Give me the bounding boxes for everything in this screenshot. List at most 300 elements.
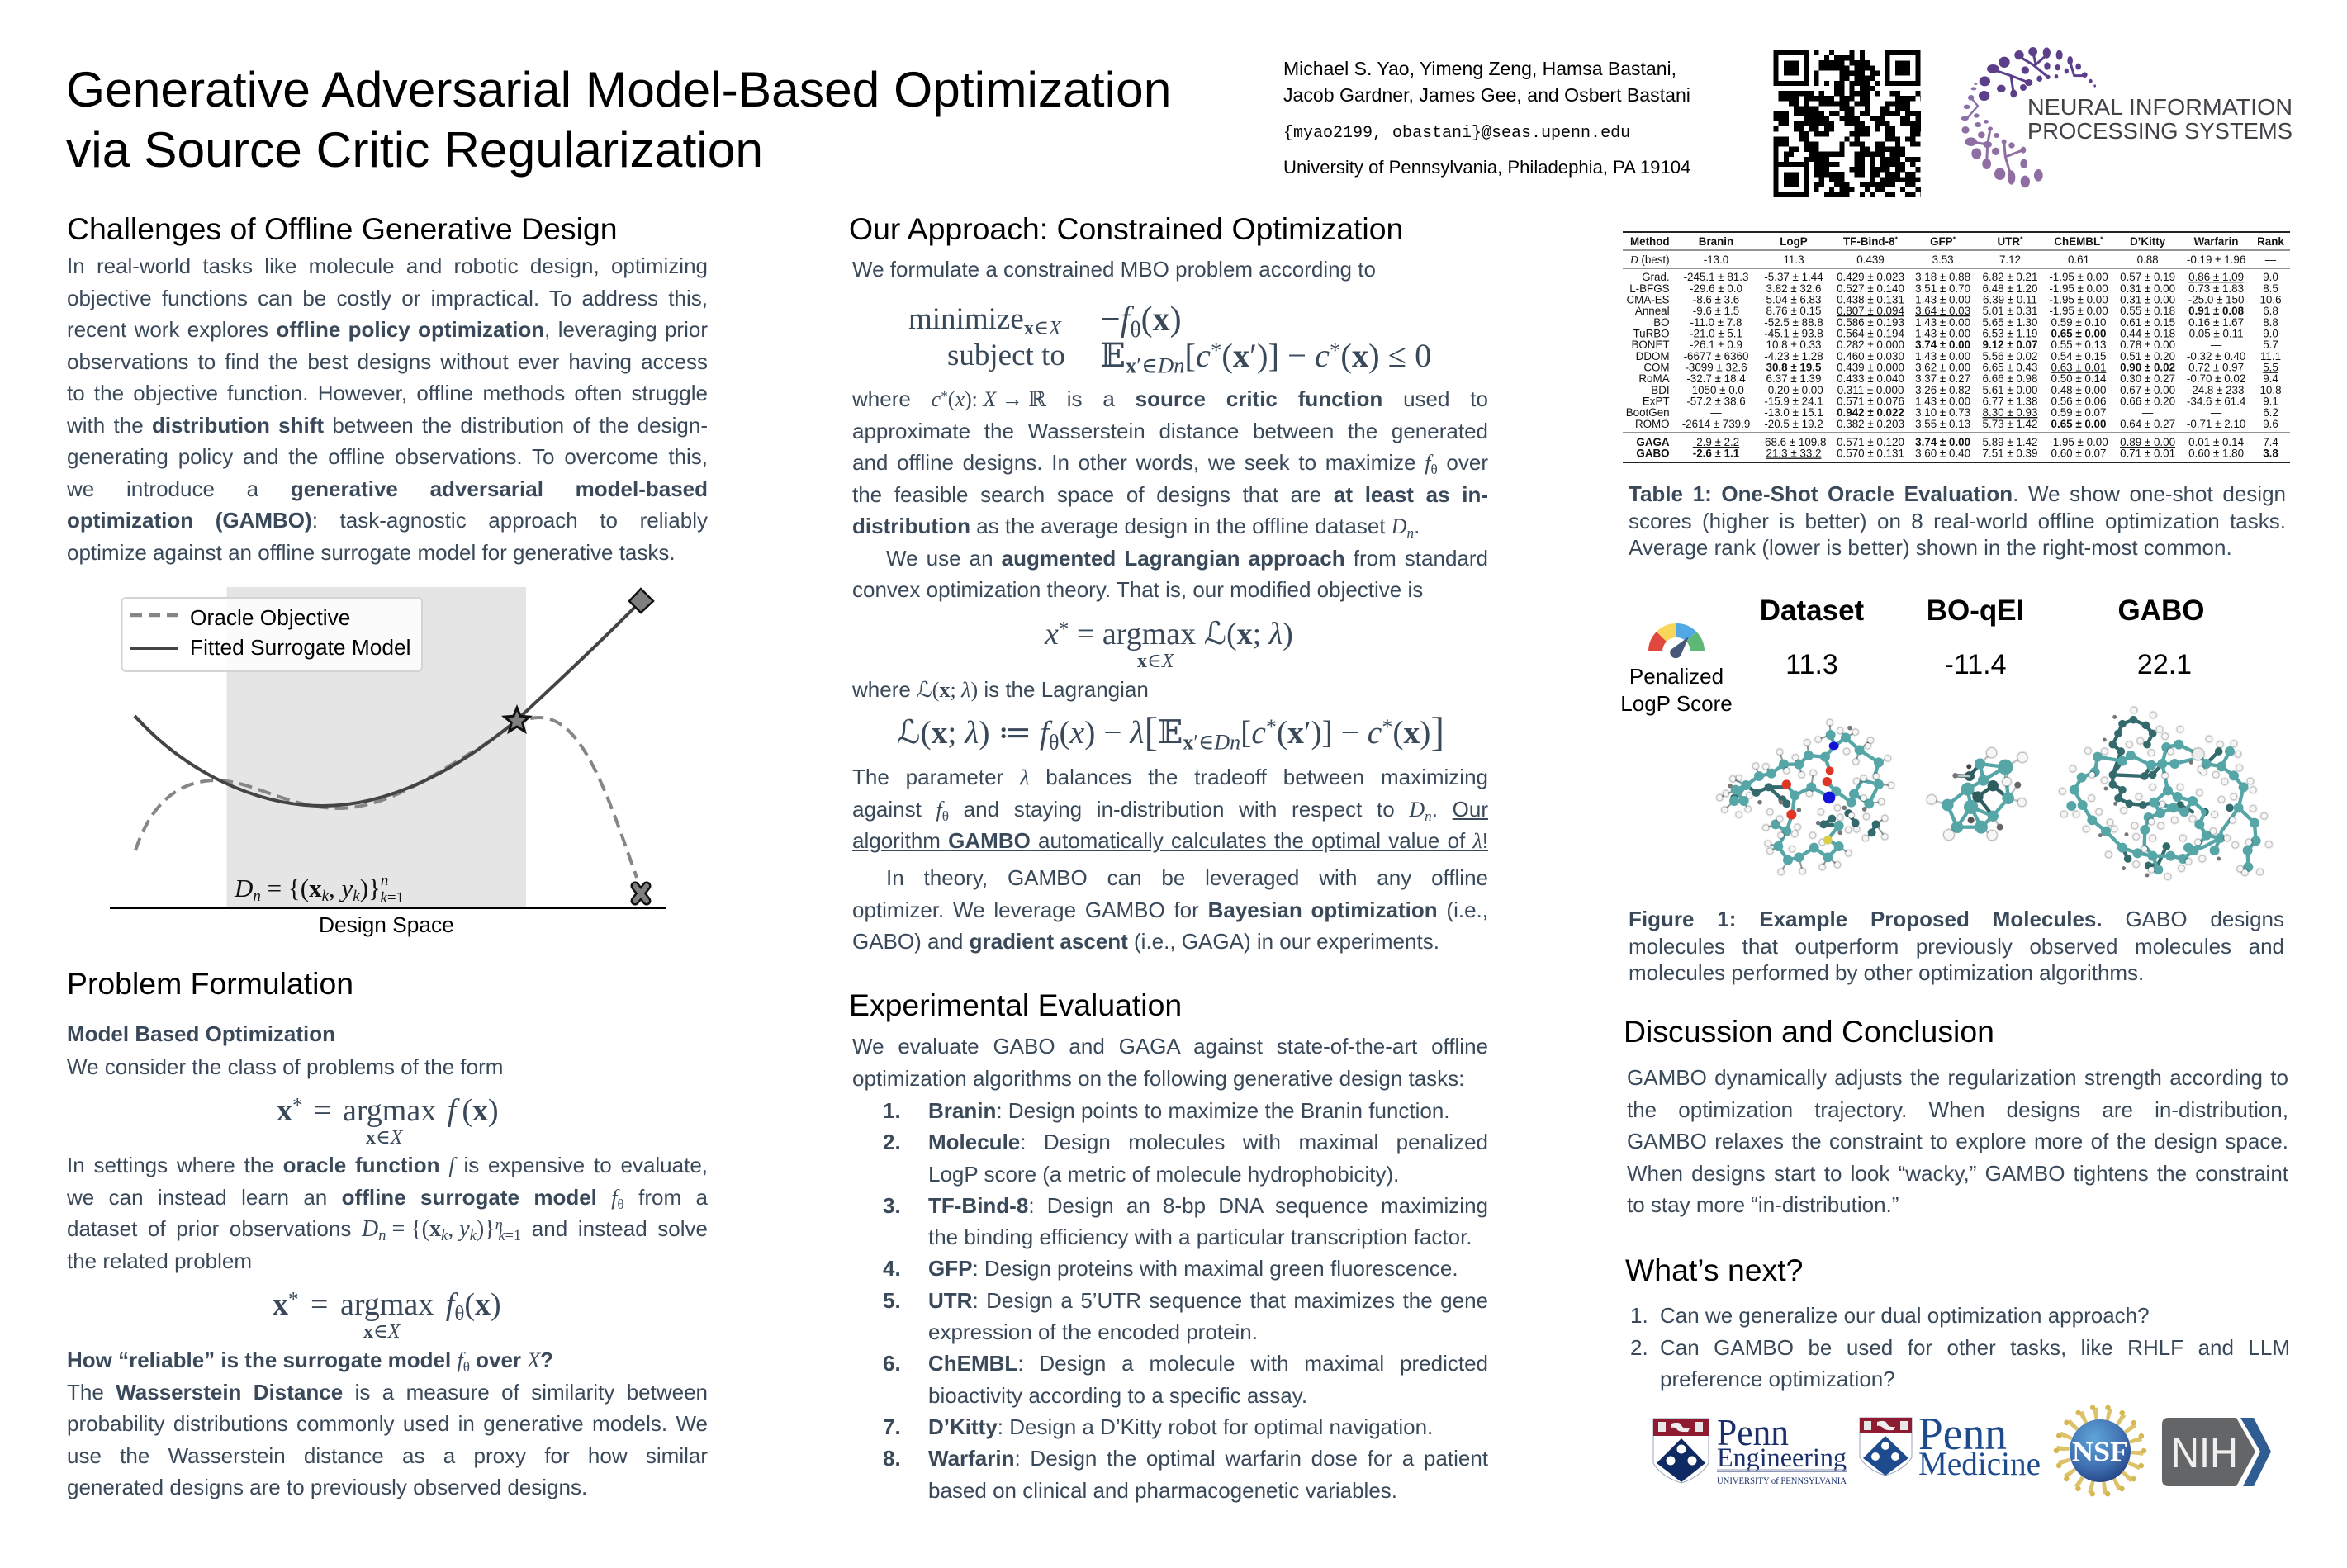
list: design tasks: D’Kitty: Design a D’Kitty robot for optimal navigation. — [928, 1414, 1433, 1439]
table header: LogP — [1780, 235, 1808, 248]
text: discussion body: When designs start to look “wacky,” GAMBO tightens the constraint — [1627, 1161, 2288, 1186]
method rows: 0.59 ± 0.10 — [2051, 316, 2106, 329]
author block — [1283, 58, 1690, 178]
list: next steps: 1. — [1630, 1303, 1648, 1328]
chart: oracle vs surrogate — [110, 587, 666, 937]
dataset label: = {( — [261, 874, 309, 902]
method rows: 5.04 ± 6.83 — [1766, 294, 1821, 306]
method rows: 0.78 ± 0.00 — [2120, 339, 2175, 351]
equation: constrained problem: subject to — [947, 339, 1065, 372]
text: source critic: the feasible search space of designs that are at least as in- — [852, 482, 1488, 507]
method rows: 5.73 ± 1.42 — [1983, 418, 2037, 430]
text: model based optimization — [67, 1021, 503, 1078]
method rows: -52.5 ± 88.8 — [1764, 316, 1823, 329]
label: penalized logp score — [1620, 664, 1733, 716]
method rows: -0.32 ± 0.40 — [2187, 350, 2245, 362]
method rows: 3.37 ± 0.27 — [1915, 372, 1970, 385]
text: wasserstein — [67, 1348, 708, 1499]
method rows: 0.72 ± 0.97 — [2188, 362, 2244, 373]
method rows: 0.55 ± 0.13 — [2051, 339, 2106, 351]
figure caption: molecules that outperform previously observed molecules and — [1629, 934, 2284, 959]
GAGA and GABO rows: -2.6 ± 1.1 — [1693, 448, 1740, 459]
dataset row: — — [2265, 253, 2277, 266]
icon: QR code — [1774, 50, 1921, 197]
method rows: — — [2211, 406, 2222, 419]
method rows: 10.8 ± 0.33 — [1766, 339, 1821, 351]
text: in theory: GABO) and gradient ascent (i.e., GAGA) in our experiments. — [852, 929, 1439, 954]
text: approach intro: We formulate a constrained MBO problem according to — [852, 257, 1376, 282]
method rows: 6.65 ± 0.43 — [1983, 362, 2037, 373]
list: design tasks: Warfarin: Design the optimal warfarin dose for a patient — [928, 1446, 1488, 1471]
text: source critic: c*(x): X → ℝ — [932, 387, 1046, 411]
text: parameter lambda: against fθ and staying in-distribution with respect to Dn. Our — [852, 796, 1488, 823]
text: challenges body: to the objective function. However, offline methods often struggle — [67, 381, 708, 405]
text: source critic: We use an augmented Lagrangian approach from standard — [886, 545, 1488, 570]
method rows: 3.64 ± 0.03 — [1915, 305, 1970, 317]
table header: * — [1953, 235, 1956, 244]
text: in theory — [852, 865, 1488, 954]
marker: diamond — [629, 589, 653, 613]
list: design tasks: 5. — [883, 1288, 901, 1313]
dataset label: , — [329, 874, 342, 902]
list: next steps: 2. — [1630, 1334, 1648, 1359]
author block: {myao2199, obastani}@seas.upenn.edu — [1283, 124, 1630, 143]
method rows: -0.71 ± 2.10 — [2187, 418, 2245, 430]
list: design tasks: ChEMBL: Design a molecule with maximal predicted — [928, 1351, 1488, 1376]
method rows: 0.942 ± 0.022 — [1837, 406, 1904, 419]
logo wordmark: PROCESSING SYSTEMS — [2027, 118, 2292, 144]
table caption: Average rank (lower is better) shown in the right-most common. — [1629, 535, 2232, 560]
column label: GABO: GABO — [2117, 595, 2205, 627]
list: design tasks: 8. — [883, 1446, 901, 1471]
method rows: 6.8 — [2263, 305, 2278, 317]
text: settings — [67, 1153, 708, 1273]
dataset row: D (best) — [1629, 253, 1670, 266]
text: evaluation intro: optimization algorithms on the following generative design tasks: — [852, 1065, 1464, 1090]
author block: University of Pennsylvania, Philadephia, PA 19104 — [1283, 157, 1690, 178]
table header — [1630, 235, 2284, 248]
method rows: 0.61 ± 0.15 — [2120, 316, 2175, 329]
GAGA and GABO rows: 0.71 ± 0.01 — [2120, 448, 2175, 459]
shield — [1860, 1418, 1912, 1476]
method rows: -1.95 ± 0.00 — [2049, 305, 2108, 317]
figure caption: molecules performed by other optimization algorithms. — [1629, 960, 2144, 985]
text: wasserstein: use the Wasserstein distance as a proxy for how similar — [67, 1443, 708, 1468]
list: design tasks: based on clinical and pharmacogenetic variables. — [928, 1478, 1397, 1503]
dataset row — [1629, 253, 2277, 266]
method rows: 9.1 — [2263, 395, 2278, 408]
GAGA and GABO rows: 3.8 — [2263, 448, 2278, 459]
GAGA and GABO rows: 21.3 ± 33.2 — [1766, 448, 1821, 459]
text: challenges body: with the distribution shift between the distribution of the design- — [67, 413, 708, 438]
method rows: 6.2 — [2263, 406, 2278, 419]
text: discussion body — [1627, 1065, 2288, 1217]
dataset label: n — [381, 872, 388, 889]
author block: Jacob Gardner, James Gee, and Osbert Bastani — [1283, 84, 1690, 106]
list: next steps: Can GAMBO be used for other tasks, like RHLF and LLM — [1660, 1334, 2290, 1359]
wordmark: UNIVERSITY of PENNSYLVANIA — [1717, 1475, 1847, 1486]
logo: Penn Medicine — [1860, 1409, 2041, 1482]
figure caption: Figure 1: Example Proposed Molecules. GABO designs — [1629, 907, 2284, 931]
logo wordmark — [2027, 94, 2292, 144]
text: parameter lambda: The parameter λ balances the tradeoff between maximizing — [852, 765, 1488, 789]
method rows: 0.86 ± 1.09 — [2188, 271, 2244, 283]
text: parameter lambda: algorithm GAMBO automatically calculates the optimal value of λ! — [852, 828, 1488, 853]
text: challenges body: observations to find the best designs without ever having access — [67, 348, 708, 373]
GAGA and GABO rows: 7.4 — [2263, 436, 2278, 448]
method rows: 0.16 ± 1.67 — [2188, 316, 2244, 329]
equation: constrained problem: −fθ(x) — [1101, 301, 1182, 342]
text: evaluation intro — [852, 1034, 1488, 1090]
table header: GFP — [1930, 235, 1953, 248]
method rows: 5.01 ± 0.31 — [1983, 305, 2037, 317]
method rows: 0.527 ± 0.140 — [1837, 282, 1904, 295]
method rows: BONET — [1631, 339, 1670, 351]
text: in theory: optimizer. We leverage GAMBO for Bayesian optimization (i.e., — [852, 897, 1488, 921]
legend labels: Oracle Objective — [190, 605, 350, 630]
method rows: 3.74 ± 0.00 — [1915, 339, 1970, 351]
method rows: 1.43 ± 0.00 — [1915, 294, 1970, 306]
table caption: scores (higher is better) on 8 real-world offline optimization tasks. — [1629, 509, 2286, 533]
text: Lagrangian intro: where ℒ(x; λ) is the Lagrangian — [852, 677, 1149, 702]
GAGA and GABO rows: 3.60 ± 0.40 — [1915, 448, 1970, 459]
list: design tasks — [883, 1098, 1488, 1503]
method rows: 0.91 ± 0.08 — [2188, 305, 2245, 317]
dataset label: k — [353, 888, 360, 905]
method rows: BDI — [1651, 384, 1670, 396]
method rows: -1050 ± 0.0 — [1688, 384, 1744, 396]
method rows: 0.56 ± 0.06 — [2051, 395, 2106, 408]
method rows: 0.66 ± 0.20 — [2120, 395, 2175, 408]
table header: Branin — [1699, 235, 1733, 248]
method rows: -45.1 ± 93.8 — [1764, 327, 1823, 340]
dataset label: n — [253, 888, 261, 905]
logo droplets — [1961, 47, 2096, 187]
method rows: 6.53 ± 1.19 — [1983, 327, 2037, 340]
text: challenges body: we introduce a generative adversarial model-based — [67, 476, 708, 500]
method rows: BO — [1653, 316, 1670, 329]
logo: NIH: NIH — [2171, 1429, 2238, 1477]
text: challenges body: objective functions can be costly or impractical. To address this, — [67, 286, 708, 310]
dataset row: 3.53 — [1932, 253, 1954, 266]
method rows: 8.8 — [2263, 316, 2278, 329]
molecule: BO-qEI — [1926, 746, 2028, 842]
list: design tasks: 4. — [883, 1256, 901, 1281]
GAGA and GABO rows: 0.571 ± 0.120 — [1837, 436, 1904, 448]
method rows: 5.61 ± 0.00 — [1983, 384, 2037, 396]
logo: NIH — [2162, 1418, 2271, 1486]
list: design tasks: 7. — [883, 1414, 901, 1439]
heading: Problem Formulation: Problem Formulation — [67, 966, 353, 1001]
GAGA and GABO rows: 0.60 ± 1.80 — [2188, 448, 2244, 459]
list: design tasks: LogP score (a metric of molecule hydrophobicity). — [928, 1162, 1399, 1187]
method rows: 0.48 ± 0.00 — [2051, 384, 2106, 396]
text: challenges body: In real-world tasks like molecule and robotic design, optimizing — [67, 253, 708, 278]
equation: constrained problem: 𝔼x′∈Dn[c*(x′)] − c*(x) ≤ 0 — [1100, 337, 1431, 377]
method rows: Grad. — [1642, 271, 1670, 283]
method rows: CMA-ES — [1627, 294, 1670, 306]
value: GABO score: 22.1 — [2137, 649, 2192, 680]
method rows: — — [2142, 406, 2154, 419]
method rows: 8.5 — [2263, 282, 2278, 295]
method rows: 0.67 ± 0.00 — [2120, 384, 2175, 396]
method rows: 0.44 ± 0.18 — [2120, 327, 2175, 340]
list: next steps: preference optimization? — [1660, 1367, 1895, 1391]
method rows: 1.43 ± 0.00 — [1915, 316, 1970, 329]
method rows: 0.438 ± 0.131 — [1837, 294, 1904, 306]
table header: TF-Bind-8 — [1843, 235, 1894, 248]
GAGA and GABO rows: 0.60 ± 0.07 — [2051, 448, 2106, 459]
method rows: -1.95 ± 0.00 — [2049, 294, 2108, 306]
GAGA and GABO rows: 3.74 ± 0.00 — [1915, 436, 1970, 448]
heading: What's next: What’s next? — [1625, 1253, 1803, 1287]
logo: Penn Engineering — [1653, 1411, 1847, 1486]
table header: Method — [1630, 235, 1670, 248]
title: via Source Critic Regularization — [66, 121, 763, 178]
method rows: — — [2211, 339, 2222, 351]
text: challenges body: recent work explores offline policy optimization, leveraging prior — [67, 317, 708, 342]
method rows: 0.460 ± 0.030 — [1837, 350, 1904, 362]
figure caption — [1629, 907, 2284, 985]
method rows: -1.95 ± 0.00 — [2049, 271, 2108, 283]
method rows: -5.37 ± 1.44 — [1764, 271, 1823, 283]
method rows: -0.70 ± 0.02 — [2187, 372, 2245, 385]
table header: * — [2020, 235, 2023, 244]
text: in theory: In theory, GAMBO can be leveraged with any offline — [886, 865, 1488, 890]
text: settings: we can instead learn an offline surrogate model fθ from a — [67, 1184, 708, 1211]
method rows: -6677 ± 6360 — [1684, 350, 1748, 362]
text: source critic: distribution as the average design in the offline dataset Dn. — [852, 514, 1420, 541]
equation: argmax f theta — [273, 1287, 501, 1343]
method rows: 3.55 ± 0.13 — [1915, 418, 1970, 430]
wordmark: Engineering — [1717, 1443, 1847, 1473]
method rows: 0.429 ± 0.023 — [1837, 271, 1904, 283]
GAGA and GABO rows: 0.01 ± 0.14 — [2188, 436, 2245, 448]
GAGA and GABO rows: 0.89 ± 0.00 — [2120, 436, 2175, 448]
wordmark: Penn — [1918, 1409, 2007, 1460]
method rows: 3.26 ± 0.82 — [1915, 384, 1970, 396]
equation: argmax Lagrangian — [1044, 617, 1293, 672]
method rows: -24.8 ± 233 — [2188, 384, 2244, 396]
method rows: 9.6 — [2263, 418, 2278, 430]
text: challenges body — [67, 253, 708, 565]
method rows: 1.43 ± 0.00 — [1915, 350, 1970, 362]
GAGA and GABO rows: 7.51 ± 0.39 — [1983, 448, 2037, 459]
method rows: 0.90 ± 0.02 — [2120, 362, 2175, 373]
legend box — [122, 598, 422, 671]
method rows: 3.82 ± 32.6 — [1766, 282, 1821, 295]
list: design tasks: Branin: Design points to maximize the Branin function. — [928, 1098, 1450, 1123]
method rows: -3099 ± 32.6 — [1685, 362, 1747, 373]
GAGA and GABO rows: -68.6 ± 109.8 — [1761, 436, 1826, 448]
method rows: 6.39 ± 0.11 — [1983, 294, 2037, 306]
method rows: 0.311 ± 0.000 — [1837, 384, 1904, 396]
method rows: 6.82 ± 0.21 — [1983, 271, 2037, 283]
text: settings: In settings where the oracle function f is expensive to evaluate, — [67, 1153, 708, 1177]
gold rays — [2056, 1407, 2144, 1495]
GAGA and GABO rows: -2.9 ± 2.2 — [1693, 436, 1739, 448]
method rows: ExPT — [1643, 395, 1670, 408]
method rows: 3.51 ± 0.70 — [1915, 282, 1970, 295]
text: challenges body: optimize against an offline surrogate model for generative tasks. — [67, 540, 676, 565]
method rows: 0.50 ± 0.14 — [2051, 372, 2107, 385]
method rows: 10.8 — [2259, 384, 2282, 396]
equation: argmax f theta: x* = argmax fθ(x) — [273, 1287, 501, 1325]
table header: ChEMBL — [2054, 235, 2100, 248]
dataset row: -13.0 — [1704, 253, 1728, 266]
table header: * — [1894, 235, 1898, 244]
method rows: -8.6 ± 3.6 — [1693, 294, 1739, 306]
text: source critic — [852, 386, 1488, 602]
list: design tasks: 1. — [883, 1098, 901, 1123]
text: discussion body: to stay more “in-distribution.” — [1627, 1192, 1899, 1217]
method rows: -21.0 ± 5.1 — [1690, 327, 1742, 340]
method rows: 0.57 ± 0.19 — [2120, 271, 2175, 283]
dataset row: 0.88 — [2137, 253, 2159, 266]
dataset row: 0.61 — [2068, 253, 2089, 266]
method rows: 6.37 ± 1.39 — [1766, 372, 1821, 385]
value: BO-qEI score: -11.4 — [1944, 649, 2006, 680]
oracle objective curve — [135, 718, 637, 878]
table header: D’Kitty — [2130, 235, 2166, 248]
method rows: 0.59 ± 0.07 — [2051, 406, 2106, 419]
method rows: 0.73 ± 1.83 — [2188, 282, 2244, 295]
equation: Lagrangian: ℒ(x; λ) ≔ fθ(x) − λ[𝔼x′∈Dn[c*(x′)] − c*(x)] — [897, 708, 1444, 755]
molecule: GABO — [2058, 705, 2274, 881]
method rows: 8.30 ± 0.93 — [1983, 406, 2037, 419]
method rows: Anneal — [1635, 305, 1670, 317]
table header: Rank — [2257, 235, 2284, 248]
method rows: 0.65 ± 0.00 — [2051, 327, 2106, 340]
method rows: -1.95 ± 0.00 — [2049, 282, 2108, 295]
method rows: 0.63 ± 0.01 — [2051, 362, 2106, 373]
wordmark: Medicine — [1918, 1445, 2041, 1482]
method rows: 0.807 ± 0.094 — [1837, 305, 1904, 317]
dataset label: D — [234, 874, 253, 902]
method rows: -0.20 ± 0.00 — [1764, 384, 1823, 396]
dataset row: -0.19 ± 1.96 — [2187, 253, 2245, 266]
text: discussion body: the optimization trajectory. When designs are in-distribution, — [1627, 1097, 2288, 1121]
text: settings: Dn = {(xk, yk)}nk=1 — [362, 1216, 521, 1244]
method rows: 9.4 — [2263, 372, 2278, 385]
method rows: 9.12 ± 0.07 — [1983, 339, 2037, 351]
table caption — [1629, 481, 2286, 560]
wordmark — [1918, 1409, 2041, 1482]
method rows: 6.66 ± 0.98 — [1983, 372, 2037, 385]
method rows: 0.05 ± 0.11 — [2189, 327, 2244, 340]
table header: UTR — [1997, 235, 2020, 248]
equation: argmax f: x∈X — [366, 1127, 402, 1149]
heading: Experimental Evaluation: Experimental Evaluation — [849, 988, 1182, 1022]
method rows — [1626, 271, 2282, 430]
method rows: -245.1 ± 81.3 — [1684, 271, 1748, 283]
dataset row: 11.3 — [1783, 253, 1804, 266]
list: next steps: Can we generalize our dual optimization approach? — [1660, 1303, 2150, 1328]
equation: argmax f — [277, 1093, 499, 1149]
text: discussion body: GAMBO relaxes the constraint to explore more of the design space. — [1627, 1129, 2288, 1153]
equation: constrained problem — [908, 301, 1431, 377]
method rows: 9.0 — [2263, 271, 2278, 283]
text: parameter lambda — [852, 765, 1488, 853]
icon: NeurIPS logo — [1961, 47, 2292, 188]
method rows: 5.5 — [2263, 362, 2278, 373]
method rows: -29.6 ± 0.0 — [1690, 282, 1742, 295]
text: challenges body: generating policy and the offline observations. To overcome this, — [67, 444, 708, 469]
text: settings: the related problem — [67, 1248, 252, 1273]
axis label: Design Space — [319, 912, 454, 937]
method rows: 0.64 ± 0.27 — [2120, 418, 2175, 430]
column label: Dataset: Dataset — [1760, 595, 1864, 627]
dataset label: k=1 — [380, 889, 404, 907]
GAGA and GABO rows: 5.89 ± 1.42 — [1983, 436, 2037, 448]
list: design tasks: 2. — [883, 1130, 901, 1154]
title — [66, 61, 1171, 178]
text: discussion body: GAMBO dynamically adjusts the regularization strength according to — [1627, 1065, 2288, 1090]
list: design tasks: expression of the encoded protein. — [928, 1319, 1258, 1344]
text: source critic: convex optimization theory. That is, our modified objective is — [852, 577, 1423, 602]
method rows: 5.56 ± 0.02 — [1983, 350, 2037, 362]
equation: constrained problem: minimizex∈X — [908, 302, 1061, 339]
logo wordmark: NEURAL INFORMATION — [2027, 94, 2292, 120]
method rows: TuRBO — [1633, 327, 1670, 340]
legend: oracle sample — [130, 613, 178, 617]
dataset label: x — [309, 874, 322, 902]
method rows: RoMA — [1638, 372, 1670, 385]
heading: Our Approach: Our Approach: Constrained Optimization — [849, 211, 1403, 246]
method rows: 0.433 ± 0.040 — [1837, 372, 1904, 385]
icon: score gauge — [1648, 623, 1705, 659]
table header: Warfarin — [2194, 235, 2239, 248]
method rows: 6.77 ± 1.38 — [1983, 395, 2037, 408]
method rows: 6.48 ± 1.20 — [1983, 282, 2037, 295]
GAGA and GABO rows: -1.95 ± 0.00 — [2049, 436, 2108, 448]
equation: argmax Lagrangian: x∈X — [1137, 651, 1174, 672]
list: design tasks: 6. — [883, 1351, 901, 1376]
table caption: Table 1: One-Shot Oracle Evaluation. We show one-shot design — [1629, 481, 2286, 506]
method rows: 0.571 ± 0.076 — [1837, 395, 1904, 408]
text: challenges body: optimization (GAMBO): task-agnostic approach to reliably — [67, 508, 708, 533]
method rows: -25.0 ± 150 — [2188, 294, 2244, 306]
value: dataset score: 11.3 — [1785, 649, 1838, 680]
GAGA and GABO rows: 0.570 ± 0.131 — [1837, 448, 1904, 459]
text: evaluation intro: We evaluate GABO and GAGA against state-of-the-art offline — [852, 1034, 1488, 1059]
method rows: 0.382 ± 0.203 — [1837, 418, 1904, 430]
offline data region — [226, 587, 526, 907]
shield — [1653, 1419, 1709, 1483]
NSF text: NSF — [2072, 1437, 2128, 1467]
method rows: 0.65 ± 0.00 — [2051, 418, 2106, 430]
text: source critic: approximate the Wasserstein distance between the generated — [852, 418, 1488, 443]
logo: NSF — [2053, 1405, 2147, 1496]
method rows: L-BFGS — [1629, 282, 1670, 295]
GAGA and GABO rows — [1636, 436, 2278, 459]
text: settings: dataset of prior observations and instead solve — [67, 1216, 708, 1241]
text: model based optimization: We consider the class of problems of the form — [67, 1054, 503, 1078]
method rows: 0.282 ± 0.000 — [1837, 339, 1904, 351]
legend labels — [190, 605, 411, 660]
equation: argmax f theta: x∈X — [363, 1321, 400, 1343]
method rows: 3.10 ± 0.73 — [1915, 406, 1970, 419]
globe — [2070, 1419, 2131, 1482]
text: wasserstein: probability distributions commonly used in generative models. We — [67, 1411, 708, 1436]
method rows: 0.564 ± 0.194 — [1837, 327, 1904, 340]
method rows: -20.5 ± 19.2 — [1764, 418, 1823, 430]
text: wasserstein: The Wasserstein Distance is a measure of similarity between — [67, 1379, 708, 1404]
label: penalized logp score: Penalized — [1629, 664, 1724, 689]
text: source critic: where is a source critic function used to — [852, 386, 1488, 411]
table: one-shot oracle evaluation — [1623, 231, 2290, 463]
molecule: dataset — [1715, 718, 1896, 877]
